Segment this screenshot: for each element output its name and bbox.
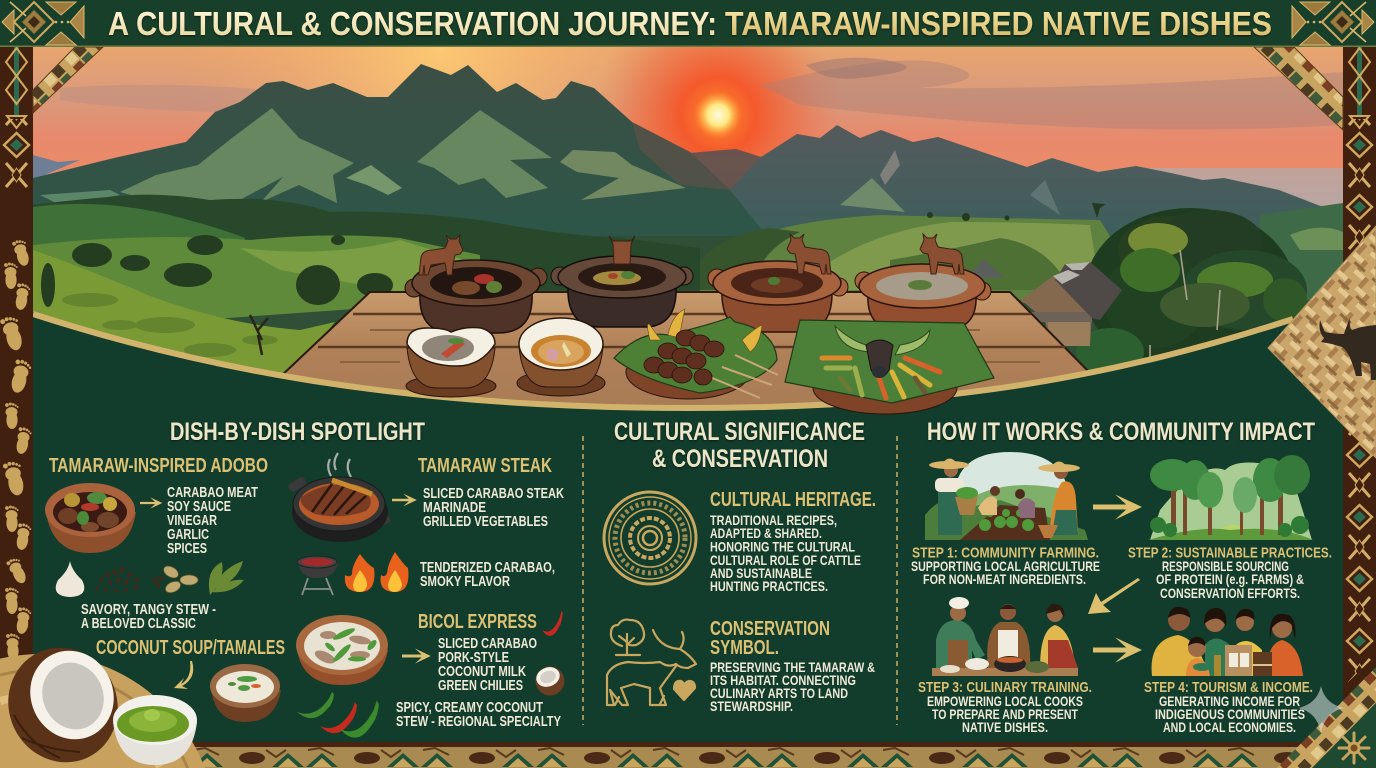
step 4 text: AND LOCAL ECONOMIES. — [1163, 719, 1296, 735]
illustration: sustainable practices — [1148, 455, 1313, 540]
ornament left — [2, 2, 84, 45]
skewer plate — [614, 309, 778, 399]
icon: coconut half — [0, 630, 136, 768]
icon: red chili — [542, 610, 563, 636]
conservation body: PRESERVING THE TAMARAW & — [710, 659, 875, 675]
steak ingredients: SLICED CARABAO STEAK — [423, 486, 564, 502]
banana leaf plate — [785, 320, 994, 414]
heritage body: HUNTING PRACTICES. — [710, 578, 828, 594]
curved arrow — [174, 661, 193, 689]
heading: dish spotlight: DISH-BY-DISH SPOTLIGHT — [170, 418, 425, 446]
icon: green sauce bowl — [113, 695, 197, 765]
heading: cultural significance: CULTURAL SIGNIFICANCE — [614, 418, 865, 446]
icon: bicol bowl — [296, 615, 388, 685]
sparkle mark — [1298, 686, 1344, 733]
left border — [0, 47, 33, 687]
adobo ingredients: VINEGAR — [167, 513, 217, 529]
title: TAMARAW-INSPIRED NATIVE DISHES — [725, 5, 1272, 42]
step 2 text: RESPONSIBLE SOURCING — [1162, 558, 1289, 574]
heritage body — [710, 512, 861, 594]
far blue hill — [33, 155, 80, 180]
coconut bowl 2 — [517, 318, 605, 396]
adobo ingredients — [167, 485, 258, 557]
heritage body: TRADITIONAL RECIPES, — [710, 512, 837, 528]
step 3 text: EMPOWERING LOCAL COOKS — [927, 693, 1083, 709]
adobo heading: TAMARAW-INSPIRED ADOBO — [49, 455, 268, 477]
tree line — [33, 195, 700, 290]
heritage body: ADAPTED & SHARED. — [710, 525, 822, 541]
steak description: SMOKY FLAVOR — [420, 574, 510, 590]
landscape scene — [33, 47, 1343, 420]
right mountains — [640, 125, 1323, 240]
clay pot 4 — [855, 234, 991, 330]
icon: coconut soup bowl — [210, 664, 281, 722]
icon: sunburst — [1339, 733, 1369, 763]
steak description — [420, 560, 555, 590]
adobo description: A BELOVED CLASSIC — [81, 616, 196, 632]
conservation body: STEWARDSHIP. — [710, 698, 793, 714]
steak ingredients: MARINADE — [423, 500, 486, 516]
heading: cultural significance: & CONSERVATION — [652, 445, 828, 473]
step 3 text: STEP 3: CULINARY TRAINING. — [918, 679, 1092, 696]
diagonal corner band right — [1254, 47, 1343, 130]
gold curve — [33, 314, 1293, 408]
icon: small coconut — [533, 664, 564, 696]
steak description: TENDERIZED CARABAO, — [420, 560, 555, 576]
icon: flame left — [345, 554, 374, 592]
panel: dish-by-dish spotlight — [45, 418, 564, 738]
arrow — [392, 494, 417, 506]
step 3 text: NATIVE DISHES. — [962, 719, 1048, 735]
steak heading: TAMARAW STEAK — [418, 455, 552, 477]
panel: cultural significance — [604, 418, 876, 714]
adobo ingredients: SOY SAUCE — [167, 499, 231, 515]
heritage heading: CULTURAL HERITAGE. — [710, 489, 876, 511]
bicol ingredients — [438, 636, 537, 694]
step 2 text: OF PROTEIN (e.g. FARMS) & — [1156, 571, 1304, 587]
hut — [966, 259, 1122, 346]
coconut bowl 1 — [406, 328, 496, 397]
heritage body: HONORING THE CULTURAL — [710, 538, 855, 554]
icon: chilies — [297, 692, 379, 738]
heading: cultural significance — [614, 418, 865, 473]
step 1 text: FOR NON-MEAT INGREDIENTS. — [923, 571, 1086, 587]
step 4 text — [1144, 679, 1313, 735]
sun — [694, 91, 742, 139]
clay pot 3 — [708, 234, 848, 332]
serving tray bottom left — [0, 630, 205, 768]
column dividers — [583, 436, 897, 725]
step 1 text: STEP 1: COMMUNITY FARMING. — [912, 544, 1099, 562]
corner weave bottom right — [1277, 655, 1376, 768]
illustration: tourism and income — [1152, 607, 1303, 676]
illustration: culinary training — [932, 597, 1078, 676]
conservation body: ITS HABITAT. CONNECTING — [710, 672, 856, 688]
heritage body: CULTURAL ROLE OF CATTLE — [710, 552, 861, 568]
bottom pattern strip — [0, 742, 1376, 768]
icon: kettle grill — [297, 556, 338, 595]
conservation body — [710, 659, 875, 714]
step 4 text: STEP 4: TOURISM & INCOME. — [1144, 679, 1313, 696]
arrow — [140, 497, 162, 509]
adobo ingredients: CARABAO MEAT — [167, 485, 258, 501]
right border — [1343, 47, 1376, 687]
icon: adobo bowl — [45, 483, 136, 553]
step 4 text: GENERATING INCOME FOR — [1159, 693, 1300, 709]
icon: garlic — [56, 561, 84, 597]
arrow — [1093, 637, 1142, 663]
steak ingredients — [423, 486, 564, 530]
heritage body: AND SUSTAINABLE — [710, 565, 812, 581]
icon: flame right — [381, 552, 408, 592]
curved content panel — [33, 312, 1343, 746]
steak ingredients: GRILLED VEGETABLES — [423, 514, 548, 530]
dishes on table — [405, 234, 994, 414]
step 3 text: TO PREPARE AND PRESENT — [932, 706, 1078, 722]
conservation heading: CONSERVATION — [710, 618, 830, 640]
bicol heading: BICOL EXPRESS — [418, 611, 537, 633]
arrow — [1093, 494, 1142, 520]
conservation heading — [710, 618, 830, 659]
table — [280, 292, 1092, 420]
icon: grill pan — [287, 453, 391, 542]
illustration: community farming — [925, 452, 1088, 540]
title: A CULTURAL & CONSERVATION JOURNEY: — [108, 5, 717, 42]
step 2 text — [1128, 544, 1332, 601]
conservation body: CULINARY ARTS TO LAND — [710, 685, 848, 701]
title — [108, 5, 1272, 42]
coconut soup heading: COCONUT SOUP/TAMALES — [96, 637, 285, 659]
arrow — [1088, 578, 1140, 614]
bicol description: STEW - REGIONAL SPECIALTY — [396, 714, 561, 730]
left mountain — [33, 64, 770, 240]
arrow — [402, 649, 431, 663]
forest — [1076, 208, 1307, 376]
diagonal corner band left — [33, 47, 103, 113]
bicol ingredients: PORK-STYLE — [438, 650, 509, 666]
adobo description: SAVORY, TANGY STEW - — [81, 602, 216, 618]
bicol ingredients: SLICED CARABAO — [438, 636, 537, 652]
adobo description — [81, 602, 216, 632]
step 1 text: SUPPORTING LOCAL AGRICULTURE — [911, 558, 1100, 574]
adobo ingredients: GARLIC — [167, 527, 209, 543]
icon: emblem — [604, 492, 696, 584]
woven mat — [1268, 226, 1376, 458]
icon: seeds — [152, 564, 198, 595]
bicol ingredients: COCONUT MILK — [438, 664, 526, 680]
adobo ingredients: SPICES — [167, 541, 207, 557]
step 4 text: INDIGENOUS COMMUNITIES — [1155, 706, 1305, 722]
conservation heading: SYMBOL. — [710, 637, 779, 659]
clay pot 1 — [405, 235, 547, 333]
step 3 text — [918, 679, 1092, 735]
panel: how it works — [911, 418, 1332, 735]
icon: tamaraw conservation — [607, 620, 696, 705]
right hills — [700, 215, 1150, 300]
bicol ingredients: GREEN CHILIES — [438, 678, 523, 694]
title bar — [0, 0, 1376, 47]
ornament right — [1292, 2, 1374, 45]
bicol description: SPICY, CREAMY COCONUT — [396, 700, 543, 716]
icon: peppercorns — [96, 567, 140, 592]
step 2 text: CONSERVATION EFFORTS. — [1160, 585, 1300, 601]
step 1 text — [911, 544, 1100, 587]
bicol description — [396, 700, 561, 730]
valley base — [33, 236, 1343, 416]
clay pot 2 — [551, 236, 693, 327]
icon: bay leaf — [209, 561, 244, 595]
left hills — [33, 204, 245, 262]
